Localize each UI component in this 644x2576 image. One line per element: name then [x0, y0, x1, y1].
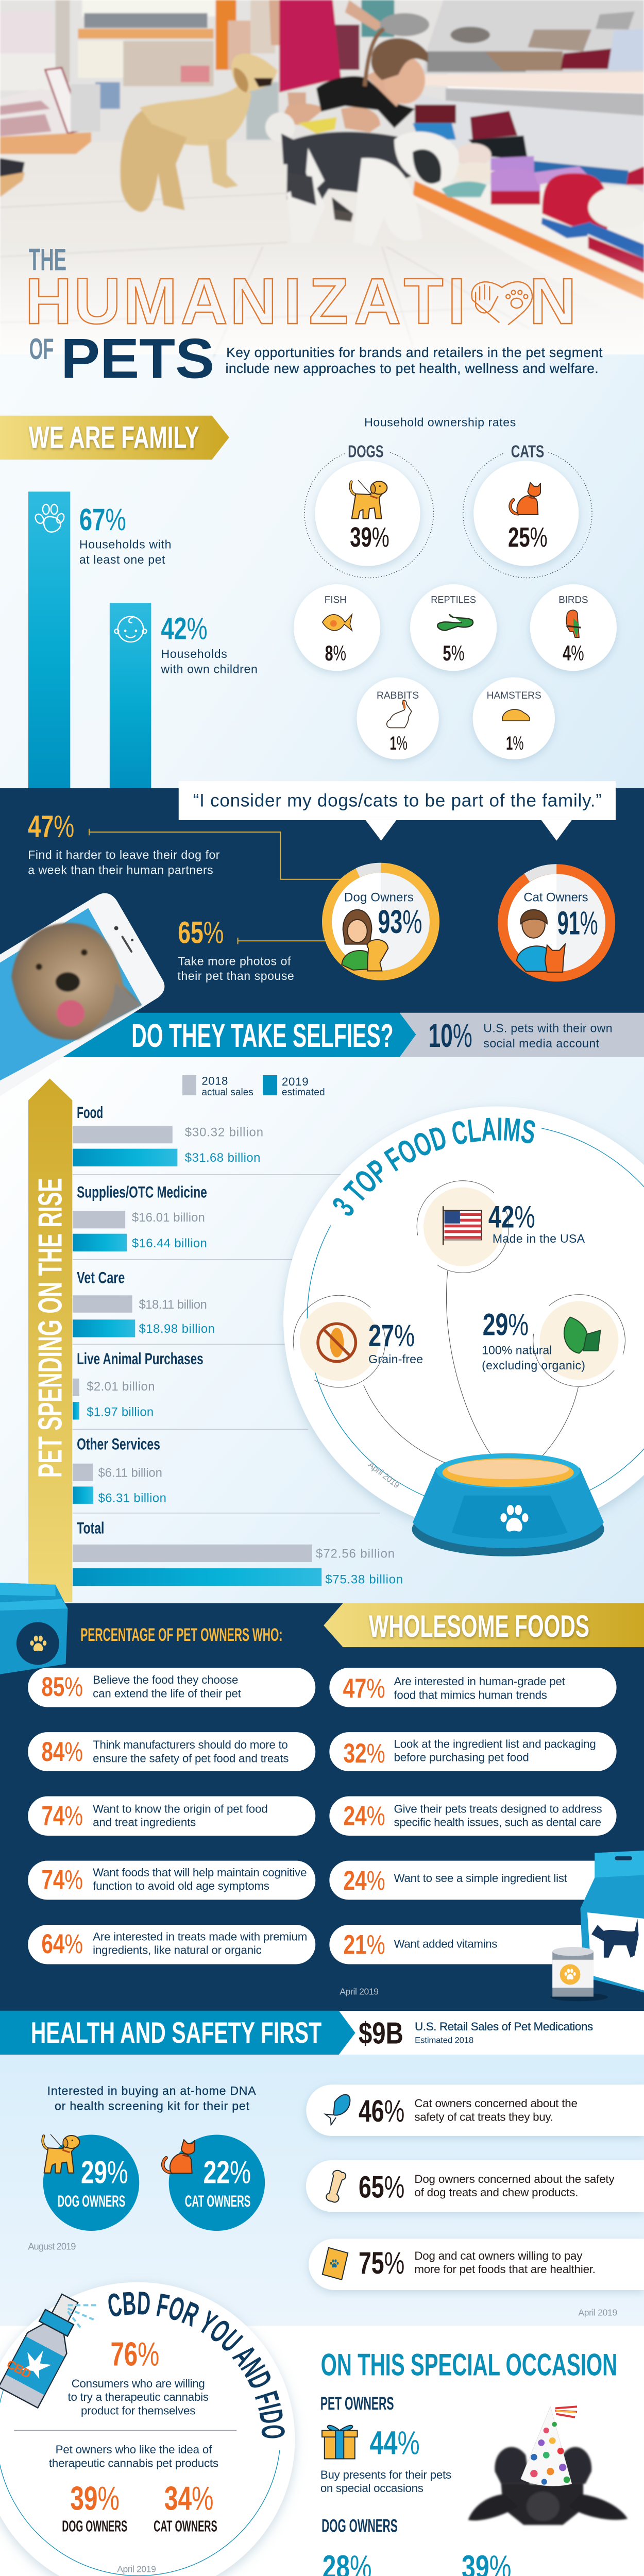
pill: 74% cognitive: function to avoid old age symptoms — [93, 1879, 269, 1892]
circle: dogs 39% — [304, 442, 433, 578]
circle: cat owners 22%: CAT OWNERS — [185, 2192, 250, 2210]
circle: 3 top food claims: 3 TOP FOOD CLAIMS — [333, 1118, 535, 1216]
pill: 64% — [28, 1925, 315, 1964]
intro text: Key opportunities for brands and retailers in the pet segment — [226, 345, 603, 360]
stat: pet owners 44%: PET OWNERS — [320, 2394, 394, 2414]
pill: 24% treats: specific health issues, such as dental care — [394, 1816, 601, 1829]
circle panel: CBD for you and Fido: 76% — [110, 2335, 159, 2373]
chart row: total: $75.38 billion — [325, 1573, 403, 1587]
circle: fish 8%: 8% — [325, 641, 346, 665]
heading banner: health and safety first — [0, 2011, 355, 2055]
pill: 74% origin: Want to know the origin of pet food — [93, 1802, 268, 1815]
chart row: total: $72.56 billion — [316, 1547, 395, 1561]
stat: 65% — [177, 914, 326, 982]
pill: 85%: 85% — [42, 1672, 83, 1702]
pill: 24% treats — [329, 1796, 617, 1836]
circle: hamsters 1%: HAMSTERS — [487, 690, 541, 701]
pill: 21%: Want added vitamins — [394, 1938, 497, 1951]
icon: CBD spray bottle — [0, 2289, 90, 2408]
circle panel: CBD for you and Fido: DOG OWNERS — [62, 2518, 127, 2535]
pill: 64%: ingredients, like natural or organic — [93, 1944, 262, 1957]
legend: 2018 and 2019 — [182, 1074, 325, 1098]
circle: hamsters 1%: 1% — [506, 733, 523, 754]
pill: 47%: food that mimics human trends — [394, 1689, 547, 1702]
pill: 46% cat treats: 46% — [359, 2093, 404, 2128]
circle panel: CBD for you and Fido: CAT OWNERS — [154, 2518, 217, 2535]
circle: birds 4% — [530, 584, 617, 671]
chart row: supplies: $16.01 billion — [132, 1211, 205, 1225]
pill: 75% willing to pay: 75% — [359, 2245, 404, 2280]
stat: 47%: 47% — [28, 809, 74, 844]
legend: 2018 and 2019: 2018 — [201, 1074, 228, 1087]
pill: 85%: can extend the life of their pet — [93, 1687, 242, 1700]
donut: dog owners 93%: Dog Owners — [344, 891, 414, 905]
circle: dogs 39%: DOGS — [348, 442, 384, 461]
pill: 74% cognitive: Want foods that will help maintain cognitive — [93, 1866, 307, 1879]
legend: 2018 and 2019: actual sales — [201, 1087, 253, 1098]
chart row: supplies: Supplies/OTC Medicine — [77, 1183, 207, 1201]
circle panel: CBD for you and Fido: product for themselves — [81, 2404, 195, 2417]
title: OF: OF — [29, 333, 54, 366]
icon: left food bag — [0, 1583, 68, 1674]
donut: cat owners 91% — [503, 869, 611, 977]
pill: 47% — [329, 1668, 617, 1707]
chart row: total: Total — [77, 1518, 104, 1537]
pill: 47%: 47% — [343, 1673, 385, 1704]
chart row: live animals — [73, 1379, 155, 1419]
stat: pet owners 44%: Buy presents for their pets — [320, 2468, 451, 2481]
claim: grain-free — [280, 1282, 423, 1400]
chart row: live animals: $2.01 billion — [87, 1380, 155, 1394]
circle panel: CBD for you and Fido: 39% — [70, 2479, 120, 2517]
bar: households with children: Households — [161, 647, 227, 660]
circle panel: CBD for you and Fido: April 2019 — [117, 2564, 156, 2574]
chart row: supplies — [73, 1183, 207, 1251]
stat: $9B retail sales — [359, 2016, 593, 2050]
chart row: food: $30.32 billion — [185, 1126, 263, 1140]
stat: pet owners 44%: 44% — [369, 2425, 420, 2462]
stat: $9B retail sales: Estimated 2018 — [415, 2036, 473, 2045]
circle: cat owners 22% — [163, 2134, 265, 2231]
icon: heart with hand and paw — [472, 282, 532, 325]
arrow: pet spending on the rise: PET SPENDING ON THE RISE — [31, 1178, 69, 1478]
legend: 2018 and 2019: estimated — [282, 1087, 325, 1098]
claim: grain-free: Grain-free — [368, 1352, 423, 1366]
claim: grain-free: 27% — [368, 1318, 415, 1353]
circle panel: CBD for you and Fido: CBD FOR YOU AND FIDO — [108, 2292, 285, 2438]
chart row: other services: Other Services — [77, 1435, 160, 1453]
title: THE: THE — [29, 242, 66, 277]
panel: health and safety, CBD, special occasion — [0, 2010, 644, 2576]
stat: $9B retail sales: $9B — [359, 2016, 403, 2050]
pill: 32%: Look at the ingredient list and packaging — [394, 1737, 596, 1750]
title: HUMANIZATION outlined letters: HUMANIZATION — [25, 265, 577, 337]
arrow: pet spending on the rise — [28, 1078, 72, 1602]
quote box: “I consider my dogs/cats to be part of the family.” — [193, 791, 602, 811]
pill: 24% treats: Give their pets treats designed to address — [394, 1802, 602, 1815]
chart row: total — [73, 1518, 403, 1587]
heading: household ownership rates: Household ownership rates — [364, 415, 516, 429]
icon: man with cat — [517, 910, 565, 972]
stats: dog owners — [321, 2516, 580, 2576]
circle: rabbits 1% — [357, 677, 439, 759]
pill: 32% — [329, 1732, 617, 1771]
circle panel: CBD for you and Fido: to try a therapeutic cannabis — [68, 2391, 209, 2403]
pill: 74% origin: and treat ingredients — [93, 1816, 196, 1829]
pill: 74% cognitive — [28, 1861, 315, 1900]
chart row: live animals: $1.97 billion — [87, 1405, 154, 1419]
claim: made in the USA: 42% — [488, 1199, 535, 1234]
text: DNA kit question — [47, 2084, 256, 2113]
circle: dogs 39%: 39% — [350, 522, 389, 553]
heading banner: health and safety first: HEALTH AND SAFETY FIRST — [31, 2016, 321, 2049]
date: April 2019 — [578, 2307, 617, 2317]
claim: made in the USA: Made in the USA — [493, 1232, 585, 1245]
stat: 65%: 65% — [178, 914, 224, 950]
chart row: vet care: $18.11 billion — [139, 1298, 207, 1312]
chart row: food: $31.68 billion — [185, 1151, 260, 1165]
circle: 3 top food claims: April 2019 — [366, 1460, 401, 1490]
pill: 75% willing to pay — [309, 2239, 644, 2290]
circle: fish 8% — [294, 584, 380, 671]
pill: 64%: 64% — [42, 1929, 83, 1959]
chart heading: live animal purchases: Live Animal Purchases — [77, 1349, 204, 1368]
circle: birds 4%: BIRDS — [558, 595, 588, 605]
circle: rabbits 1%: 1% — [390, 733, 408, 754]
legend: 2018 and 2019: 2019 — [282, 1075, 309, 1088]
pill: 65% dog treats: 65% — [359, 2169, 404, 2204]
chart row: other services: $6.31 billion — [98, 1492, 166, 1505]
circle panel: CBD for you and Fido: therapeutic cannabis pet products — [49, 2456, 218, 2469]
intro text — [226, 345, 603, 376]
phone with dog selfie and selfies banner: 10% — [428, 1017, 472, 1054]
circle panel: CBD for you and Fido: Pet owners who like the idea of — [56, 2443, 212, 2456]
claim: 100% natural: (excluding organic) — [482, 1359, 585, 1372]
pill: 75% willing to pay: Dog and cat owners willing to pay — [414, 2249, 583, 2262]
pill: 21%: 21% — [343, 1930, 385, 1960]
stat: 65%: their pet than spouse — [177, 969, 294, 982]
icon: gift — [322, 2426, 358, 2459]
bar: households with children: 42% — [161, 611, 208, 646]
circle panel: CBD for you and Fido — [0, 2281, 300, 2576]
icon: paw outline — [34, 504, 65, 532]
pill: 84%: 84% — [42, 1737, 83, 1767]
bar: households with children — [110, 603, 258, 788]
stat: pet owners 44% — [320, 2394, 451, 2495]
icon: baby face — [114, 617, 147, 642]
stat: pet owners 44%: on special occasions — [320, 2482, 423, 2495]
text: DNA kit question: Interested in buying an at-home DNA — [47, 2084, 256, 2097]
chart row: food — [73, 1103, 263, 1166]
circle: dog owners 29%: DOG OWNERS — [58, 2192, 125, 2210]
phone with dog selfie and selfies banner — [0, 893, 644, 1096]
pill: 84%: Think manufacturers should do more to — [93, 1738, 288, 1751]
circle: reptiles 5% — [410, 584, 497, 671]
chart row: other services: $6.11 billion — [98, 1466, 162, 1480]
phone with dog selfie and selfies banner: U.S. pets with their own — [483, 1021, 613, 1035]
bar: households with pets — [28, 492, 171, 788]
photo: pet store aisle with two dogs — [0, 0, 644, 358]
bar: households with pets: Households with — [79, 537, 171, 551]
icon: woman with dog — [342, 910, 388, 971]
claim: made in the USA — [404, 1168, 585, 1286]
bar: households with children: with own children — [161, 663, 258, 676]
pill: 74% cognitive: 74% — [42, 1865, 83, 1895]
heading banner: we are family — [0, 416, 229, 460]
donut: dog owners 93%: 93% — [378, 903, 422, 940]
circle: 3 top food claims — [278, 1105, 644, 1524]
stats: dog owners: DOG OWNERS — [321, 2516, 398, 2536]
quote box — [179, 781, 616, 841]
chart row: vet care: $18.98 billion — [139, 1322, 215, 1336]
pill: 84% — [28, 1732, 315, 1771]
icon: right food bag with cat — [580, 1851, 644, 1993]
pill: 32%: before purchasing pet food — [394, 1751, 529, 1764]
pill: 65% dog treats: of dog treats and chew products. — [414, 2186, 578, 2199]
circle: rabbits 1%: RABBITS — [377, 690, 419, 701]
circle: reptiles 5%: REPTILES — [431, 595, 476, 605]
chart row: vet care: Vet Care — [77, 1268, 125, 1286]
pill: 65% dog treats — [306, 2160, 644, 2212]
donut: dog owners 93% — [327, 868, 434, 975]
heading banner: we are family: WE ARE FAMILY — [29, 420, 199, 455]
chart row: vet care — [73, 1268, 215, 1337]
pill: 46% cat treats: safety of cat treats they buy. — [414, 2110, 553, 2123]
pill: 46% cat treats: Cat owners concerned about the — [414, 2097, 578, 2110]
claim: 100% natural — [482, 1276, 644, 1405]
heading: percentage of pet owners who: PERCENTAGE OF PET OWNERS WHO: — [80, 1625, 282, 1645]
title: PETS: PETS — [61, 327, 214, 390]
stat: 65%: Take more photos of — [178, 954, 291, 968]
circle: dog owners 29% — [43, 2134, 139, 2231]
chart row: supplies: $16.44 billion — [132, 1236, 207, 1250]
pill: 84%: ensure the safety of pet food and treats — [93, 1752, 289, 1765]
pill: 32%: 32% — [343, 1738, 385, 1769]
stat: 47%: a week than their human partners — [28, 863, 213, 876]
circle: cats 25%: 25% — [508, 522, 548, 553]
donut: cat owners 91%: 91% — [557, 905, 598, 942]
chart row: other services — [73, 1435, 166, 1505]
pill: 74% origin — [28, 1796, 315, 1836]
text: DNA kit question: or health screening kit for their pet — [55, 2099, 249, 2113]
pill: 85%: Believe the food they choose — [93, 1673, 238, 1686]
pill: 24% simple list: 24% — [343, 1866, 385, 1896]
claim: 100% natural: 100% natural — [482, 1343, 552, 1357]
pill: 75% willing to pay: more for pet foods that are healthier. — [414, 2263, 596, 2276]
panel: hero and we are family — [0, 0, 644, 788]
circle panel: CBD for you and Fido: 34% — [164, 2479, 214, 2517]
circle: cats 25% — [463, 442, 592, 578]
circle: reptiles 5%: 5% — [443, 641, 465, 665]
chart row: food: Food — [77, 1103, 103, 1122]
pill: 21% — [329, 1925, 617, 1964]
circle: hamsters 1% — [473, 677, 555, 759]
circle panel: CBD for you and Fido: Consumers who are willing — [72, 2377, 205, 2390]
bar: households with pets: 67% — [79, 502, 126, 537]
pill: 85% — [28, 1668, 315, 1707]
icon: blue food bowl — [412, 1453, 604, 1556]
pill: 46% cat treats — [306, 2084, 644, 2136]
pill: 47%: Are interested in human-grade pet — [394, 1675, 566, 1688]
pill: 24% simple list: Want to see a simple ingredient list — [394, 1872, 568, 1885]
pill: 74% origin: 74% — [42, 1801, 83, 1831]
circle: cats 25%: CATS — [511, 442, 544, 461]
circle: fish 8%: FISH — [325, 595, 347, 605]
circle: dog owners 29%: 29% — [81, 2155, 128, 2191]
pill: 65% dog treats: Dog owners concerned about the safety — [414, 2173, 615, 2185]
icon: spray mist — [68, 2305, 98, 2330]
circle panel: CBD for you and Fido: CBD — [4, 2357, 33, 2381]
bar: households with pets: at least one pet — [79, 553, 165, 566]
heading banner: wholesome foods — [324, 1603, 644, 1647]
pill: 24% simple list — [329, 1861, 617, 1900]
stat: 47% — [28, 809, 341, 879]
panel: family quote, donuts and selfies — [0, 781, 644, 1623]
stat: $9B retail sales: U.S. Retail Sales of Pet Medications — [415, 2020, 593, 2033]
date: August 2019 — [28, 2241, 76, 2252]
divider lines — [73, 1175, 380, 1513]
claim: 100% natural: 29% — [483, 1307, 529, 1342]
circle: cat owners 22%: 22% — [204, 2155, 251, 2191]
pill: 24% treats: 24% — [343, 1801, 385, 1831]
icon: pet food can — [550, 1947, 608, 2001]
panel: spending continued and wholesome foods — [0, 1379, 644, 2001]
date: April 2019 — [340, 1987, 379, 1997]
circle: birds 4%: 4% — [563, 641, 584, 665]
phone with dog selfie and selfies banner: social media account — [483, 1037, 600, 1050]
donut: cat owners 91%: Cat Owners — [523, 891, 588, 905]
stat: 47%: Find it harder to leave their dog for — [28, 848, 220, 861]
photo: black dog in a party hat — [468, 2406, 628, 2525]
pill: 64%: Are interested in treats made with premium — [93, 1930, 307, 1943]
phone with dog selfie and selfies banner: DO THEY TAKE SELFIES? — [131, 1017, 394, 1054]
intro text: include new approaches to pet health, wellness and welfare. — [226, 361, 599, 376]
